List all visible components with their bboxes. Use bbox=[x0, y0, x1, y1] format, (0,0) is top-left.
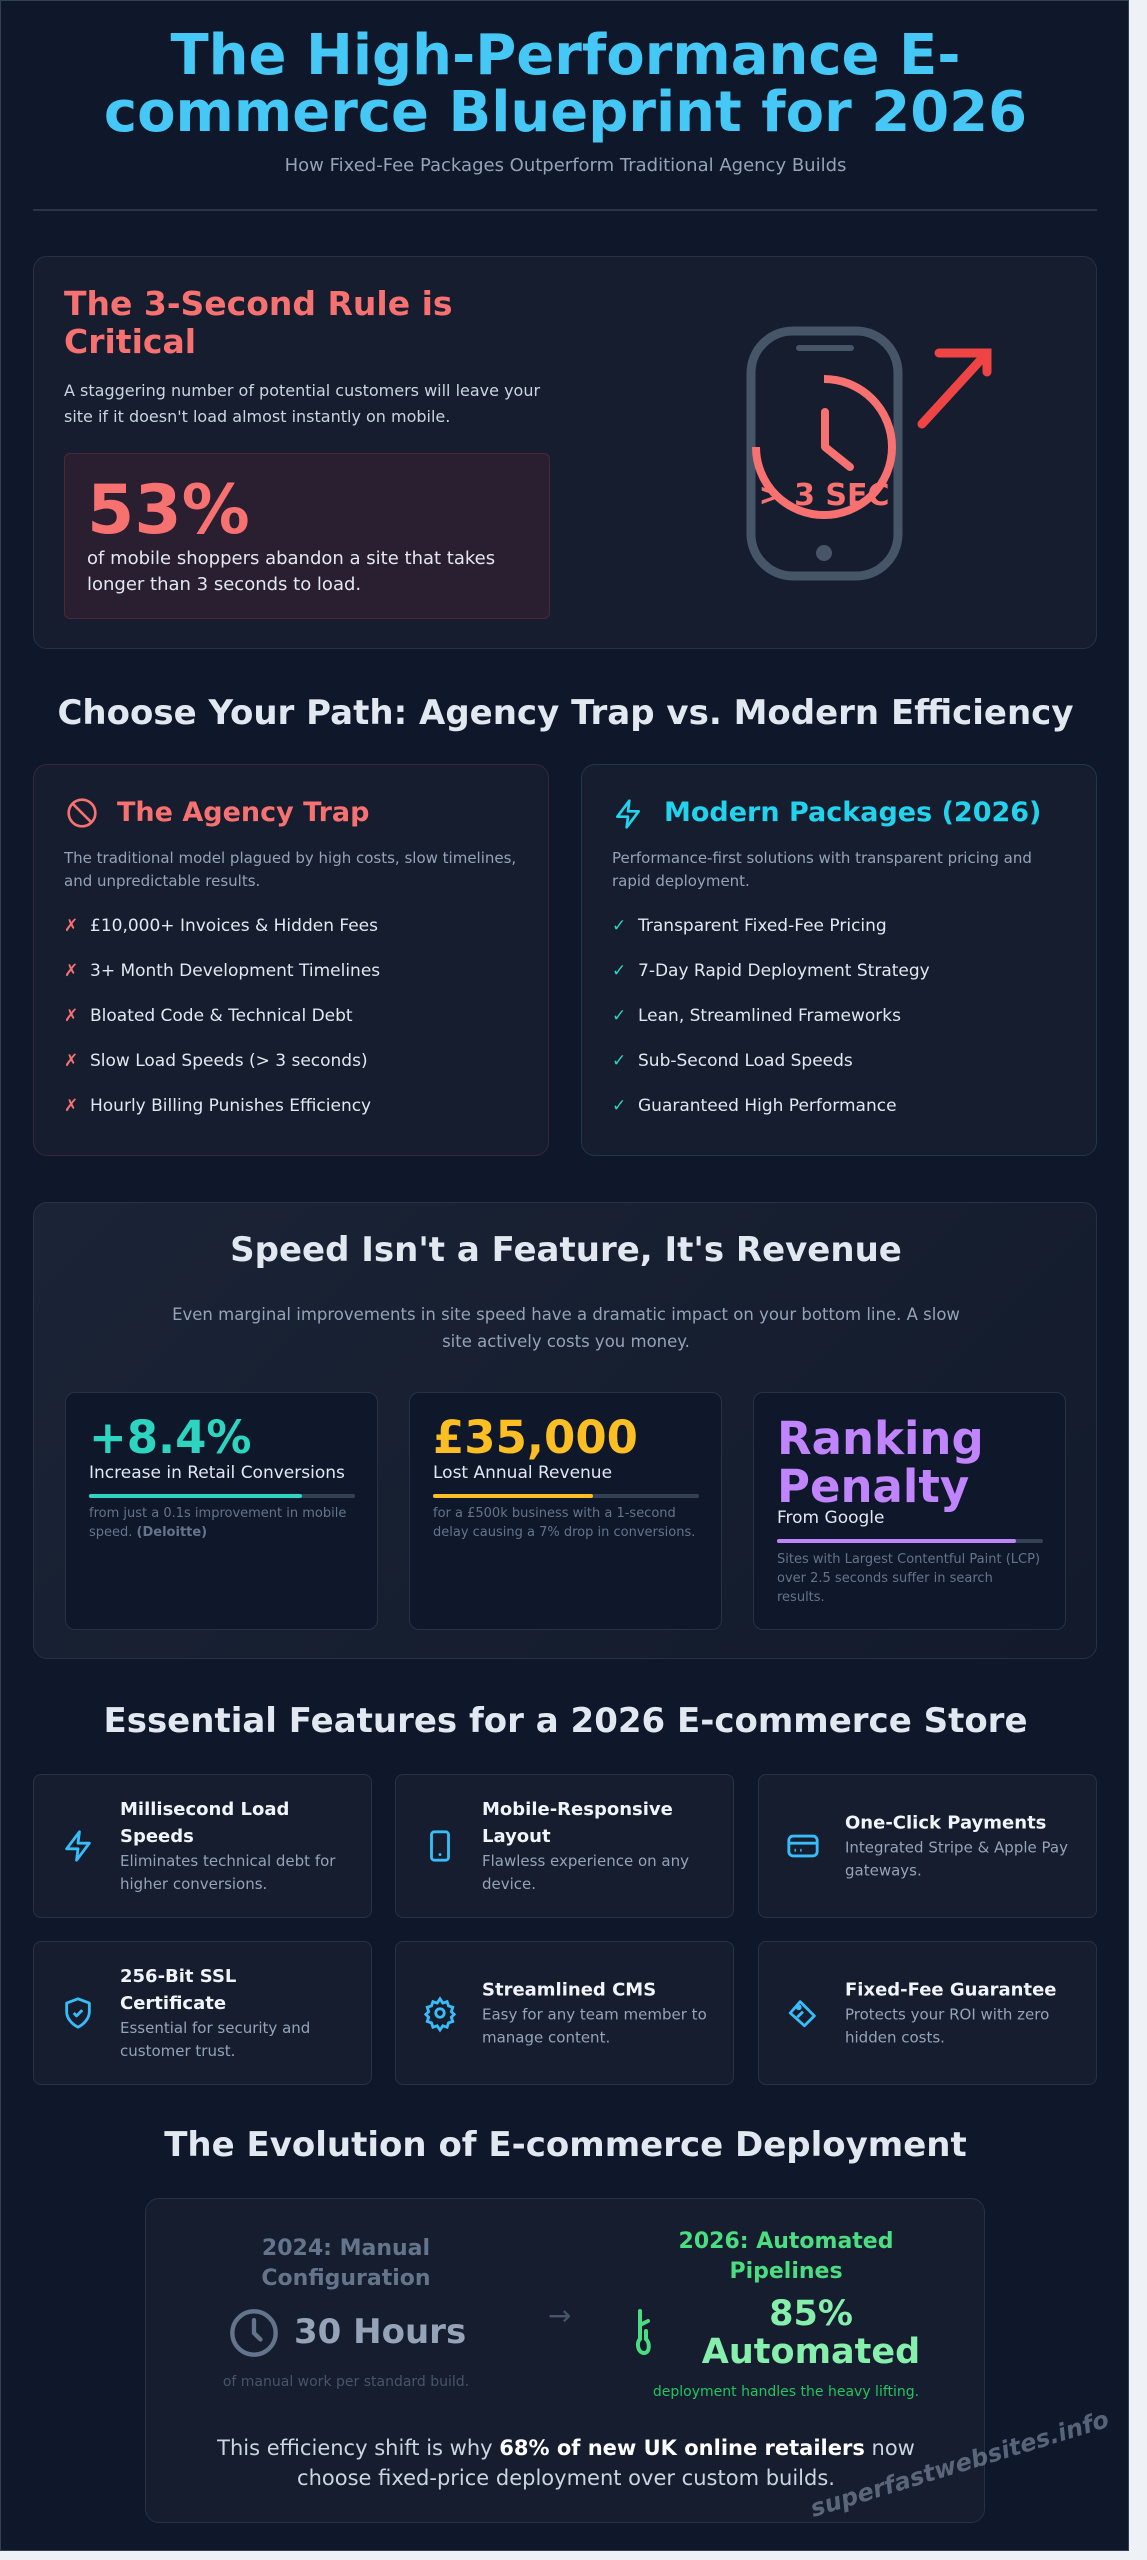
list: modern benefits: Lean, Streamlined Frameworks bbox=[638, 1006, 901, 1026]
card: conversions: from just a 0.1s improvement in mobile speed. (Deloitte) bbox=[89, 1506, 346, 1540]
heading: modern packages: Modern Packages (2026) bbox=[664, 797, 1041, 828]
feature: ssl: 256-Bit SSL Certificate bbox=[120, 1966, 236, 2014]
feature: cms bbox=[395, 1941, 734, 2085]
list: modern benefits: Sub-Second Load Speeds bbox=[638, 1051, 853, 1071]
icon: clock + 30 hours bbox=[230, 2309, 466, 2357]
panel: agency trap bbox=[33, 764, 549, 1156]
card: conversions: Increase in Retail Conversions bbox=[89, 1463, 345, 1483]
column: 2024 manual: 2024: Manual bbox=[262, 2236, 430, 2261]
feature: payments: One-Click Payments bbox=[845, 1812, 1046, 1834]
list: agency issues: ✗ bbox=[64, 1006, 78, 1026]
list: modern benefits: Transparent Fixed-Fee Pricing bbox=[638, 916, 887, 936]
feature: mobile responsive bbox=[395, 1774, 734, 1918]
title: The High-Performance E- bbox=[170, 23, 961, 88]
text: agency description: The traditional model plagued by high costs, slow timelines, and unpredictable results. bbox=[64, 849, 516, 890]
list: agency issues: ✗ bbox=[64, 916, 78, 936]
heading: choose your path: Choose Your Path: Agency Trap vs. Modern Efficiency bbox=[57, 693, 1074, 733]
feature: ssl bbox=[33, 1941, 372, 2085]
list: agency issues: ✗ bbox=[64, 1096, 78, 1116]
feature: payments bbox=[758, 1774, 1097, 1918]
feature: fixed-fee bbox=[758, 1941, 1097, 2085]
feature: millisecond load: Eliminates technical debt for higher conversions. bbox=[120, 1852, 335, 1893]
card: lost revenue: for a £500k business with a 1-second delay causing a 7% drop in conversions. bbox=[433, 1506, 695, 1540]
panel: speed is revenue bbox=[33, 1202, 1097, 1659]
card: ranking penalty: Ranking bbox=[777, 1412, 984, 1465]
feature: millisecond load: Millisecond Load Speeds bbox=[120, 1799, 289, 1847]
card: lost revenue: £35,000 bbox=[433, 1411, 638, 1464]
column: 2026 automated bbox=[636, 2229, 920, 2400]
feature: cms: Streamlined CMS bbox=[482, 1980, 656, 2000]
list: agency issues: Slow Load Speeds (> 3 seconds) bbox=[90, 1051, 368, 1071]
column: 2026 automated: deployment handles the heavy lifting. bbox=[653, 2384, 919, 2400]
text: speed intro: Even marginal improvements in site speed have a dramatic impact on your bottom line. A slow site actively costs you money. bbox=[172, 1305, 960, 1351]
feature: mobile responsive: Mobile-Responsive Layout bbox=[482, 1799, 673, 1847]
text: modern description: Performance-first solutions with transparent pricing and rapid deployment. bbox=[612, 849, 1032, 890]
list: modern benefits: ✓ bbox=[612, 1006, 626, 1026]
column: 2024 manual: of manual work per standard build. bbox=[223, 2374, 469, 2390]
heading: evolution: The Evolution of E-commerce Deployment bbox=[164, 2125, 967, 2165]
title: commerce Blueprint for 2026 bbox=[104, 80, 1027, 145]
icon: phone with clock: > 3 SEC bbox=[758, 478, 890, 513]
heading: essential features: Essential Features for a 2026 E-commerce Store bbox=[103, 1701, 1028, 1741]
list: agency issues: Bloated Code & Technical Debt bbox=[90, 1006, 353, 1026]
column: 2026 automated: 85% bbox=[769, 2294, 853, 2334]
list: agency issues: £10,000+ Invoices & Hidden Fees bbox=[90, 916, 378, 936]
feature: ssl: Essential for security and customer trust. bbox=[120, 2019, 310, 2060]
feature: millisecond load bbox=[33, 1774, 372, 1918]
feature: mobile responsive: Flawless experience on any device. bbox=[482, 1852, 689, 1893]
list: agency issues: Hourly Billing Punishes Efficiency bbox=[90, 1096, 371, 1116]
callout: 53%: of mobile shoppers abandon a site that takes longer than 3 seconds to load. bbox=[87, 548, 495, 595]
icon: phone with clock bbox=[746, 326, 992, 580]
heading: 3-second rule: Critical bbox=[64, 322, 196, 361]
list: modern benefits: ✓ bbox=[612, 1096, 626, 1116]
card: conversions bbox=[65, 1392, 378, 1630]
heading: agency trap: The Agency Trap bbox=[117, 797, 369, 828]
heading: 3-second rule: The 3-Second Rule is bbox=[64, 284, 453, 323]
list: agency issues: ✗ bbox=[64, 1051, 78, 1071]
text block: intro: A staggering number of potential customers will leave your site if it doesn't load almost instantly on mobile. bbox=[64, 381, 540, 426]
arrow: → bbox=[548, 2299, 571, 2332]
list: modern benefits: 7-Day Rapid Deployment Strategy bbox=[638, 961, 930, 981]
feature grid bbox=[33, 1774, 1097, 2085]
card: ranking penalty: Penalty bbox=[777, 1460, 969, 1513]
feature: cms: Easy for any team member to manage content. bbox=[482, 2006, 707, 2046]
list: agency issues bbox=[64, 916, 380, 1116]
heading: 3-second rule bbox=[64, 284, 453, 361]
card: ranking penalty bbox=[753, 1392, 1066, 1630]
card: lost revenue: Lost Annual Revenue bbox=[433, 1463, 612, 1483]
icon: bolt bbox=[616, 799, 640, 829]
panel: 3-second rule bbox=[33, 256, 1097, 649]
list: agency issues: 3+ Month Development Timelines bbox=[90, 961, 380, 981]
icon: ban bbox=[67, 798, 97, 828]
column: 2026 automated: Automated bbox=[702, 2332, 920, 2372]
column: 2024 manual: Configuration bbox=[261, 2266, 431, 2291]
feature: fixed-fee: Protects your ROI with zero hidden costs. bbox=[845, 2006, 1049, 2046]
icon: rocket bbox=[636, 2309, 651, 2355]
column: 2026 automated: 2026: Automated bbox=[679, 2229, 893, 2254]
callout: 53% bbox=[64, 453, 550, 619]
callout: 53%: 53% bbox=[87, 471, 250, 550]
list: modern benefits: ✓ bbox=[612, 1051, 626, 1071]
list: agency issues: ✗ bbox=[64, 961, 78, 981]
panel: evolution bbox=[145, 2198, 985, 2523]
list: modern benefits: Guaranteed High Performance bbox=[638, 1096, 897, 1116]
panel: modern packages bbox=[581, 764, 1097, 1156]
subtitle: How Fixed-Fee Packages Outperform Traditional Agency Builds bbox=[285, 155, 846, 176]
feature: payments: Integrated Stripe & Apple Pay gateways. bbox=[845, 1838, 1068, 1880]
list: modern benefits: ✓ bbox=[612, 961, 626, 981]
column: 2024 manual bbox=[223, 2236, 469, 2390]
card: lost revenue bbox=[409, 1392, 722, 1630]
heading: speed revenue: Speed Isn't a Feature, It's Revenue bbox=[230, 1230, 902, 1270]
column: 2026 automated: Pipelines bbox=[729, 2259, 843, 2284]
feature: fixed-fee: Fixed-Fee Guarantee bbox=[845, 1980, 1056, 2000]
card: ranking penalty: From Google bbox=[777, 1508, 884, 1528]
card: ranking penalty: Sites with Largest Contentful Paint (LCP) over 2.5 seconds suffer in search results. bbox=[777, 1552, 1040, 1605]
list: modern benefits bbox=[612, 916, 930, 1116]
watermark: superfastwebsites.info bbox=[807, 2405, 1112, 2523]
title bbox=[104, 23, 1027, 145]
icon: clock + 30 hours: 30 Hours bbox=[294, 2312, 466, 2352]
text: efficiency shift: This efficiency shift is why 68% of new UK online retailers now choose fixed-price deployment over custom builds. bbox=[217, 2436, 915, 2490]
card: conversions: +8.4% bbox=[89, 1411, 252, 1464]
list: modern benefits: ✓ bbox=[612, 916, 626, 936]
